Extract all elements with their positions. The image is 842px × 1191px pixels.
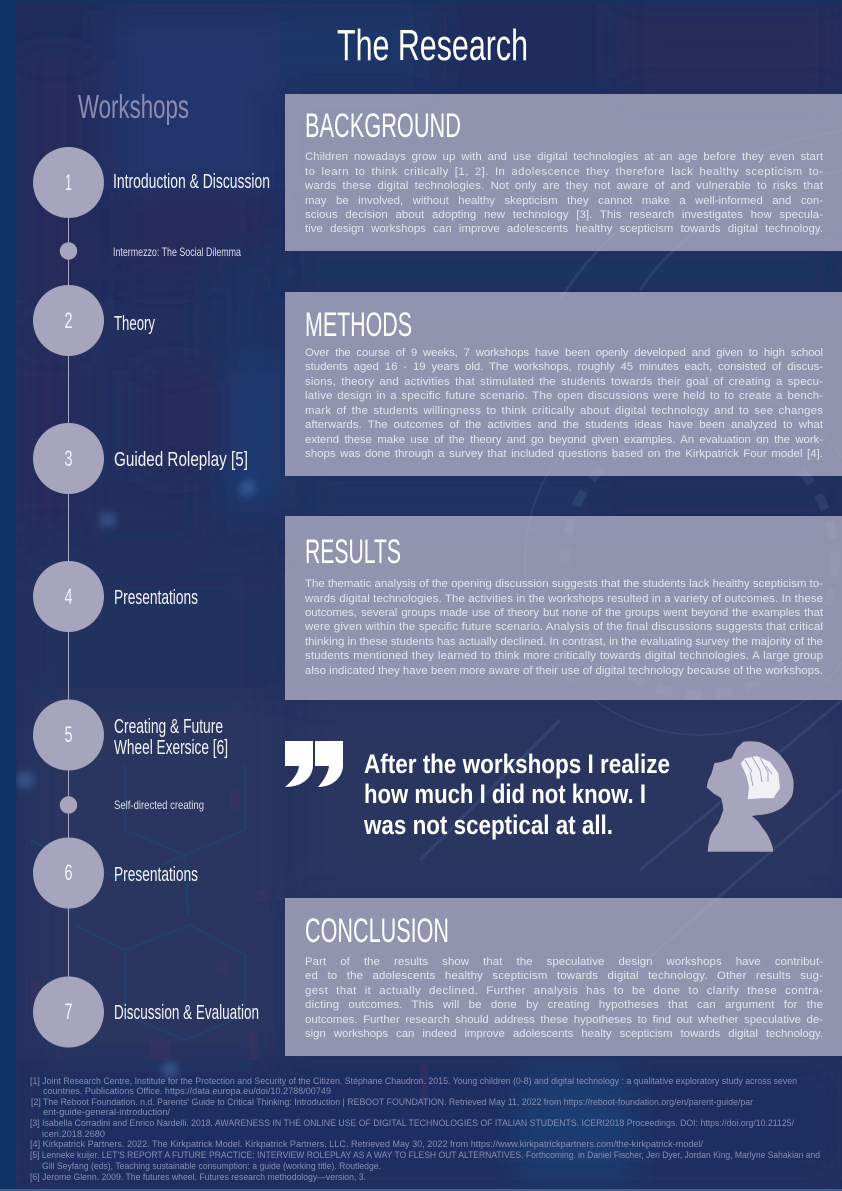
step 3 <box>33 423 248 494</box>
text: background body: tive design workshops can improve adolescents healthy scepticism towards digital technology. <box>305 223 823 235</box>
heading: conclusion: CONCLUSION <box>305 912 449 950</box>
step 4: Presentations <box>114 587 198 609</box>
timeline: workshops <box>33 147 270 1048</box>
text: methods body: students aged 16 - 19 years old. The workshops, roughly 45 minutes each, consisted of discus- <box>305 361 823 373</box>
step 6 <box>33 838 198 908</box>
step 6: 6 <box>64 860 72 885</box>
text: results body: students mentioned they learned to think more critically towards digital technologies. A large group <box>305 650 823 662</box>
heading: methods: METHODS <box>305 306 412 344</box>
references: iceri.2018.2680 <box>42 1129 105 1139</box>
references: [3] Isabella Corradini and Enrico Nardelli. 2018. AWARENESS IN THE ONLINE USE OF DIGITAL TECHNOLOGIES OF ITALIAN STUDENTS. ICERI2018 Proceedings. DOI: https://doi.org/10.21125/ <box>30 1118 795 1128</box>
panel: methods <box>285 292 842 476</box>
step 7: Discussion & Evaluation <box>114 1002 259 1024</box>
text: methods body: Over the course of 9 weeks, 7 workshops have been openly developed and given to high school <box>305 347 823 359</box>
text: results body: thinking in these students has actually declined. In contrast, in the evaluating survey the majority of the <box>305 636 823 648</box>
panel: conclusion <box>285 898 842 1056</box>
references: [2] The Reboot Foundation. n.d. Parents' Guide to Critical Thinking: Introduction | REBOOT FOUNDATION. Retrieved May 11, 2022 from https://reboot-foundation.org/en/parent-guide/par <box>31 1097 753 1107</box>
text: conclusion body <box>305 956 823 1040</box>
quote text <box>363 749 670 840</box>
references: [4] Kirkpatrick Partners. 2022. The Kirkpatrick Model. Kirkpatrick Partners, LLC. Retrieved May 30, 2022 from https://www.kirkpatrickpartners.com/the-kirkpatrick-model/ <box>30 1139 704 1149</box>
text: conclusion body: dicting outcomes. This will be done by creating hypotheses that can argument for the <box>305 999 823 1011</box>
step 2: Theory <box>114 313 155 335</box>
step 4 <box>33 561 198 632</box>
quote text: After the workshops I realize <box>364 749 670 779</box>
step 2: 2 <box>64 308 72 333</box>
heading: workshops: Workshops <box>78 88 189 125</box>
step 5: 5 <box>64 722 72 747</box>
text: methods body: lative design in a specific future scenario. The open discussions were held to to create a bench- <box>305 390 823 402</box>
references: countries. Publications Office. https://data.europa.eu/doi/10.2788/00749 <box>43 1086 331 1096</box>
panel: results <box>285 516 842 700</box>
intermezzo: Intermezzo: The Social Dilemma <box>113 245 241 259</box>
text: conclusion body: outcomes. Further research should address these hypotheses to find out whether speculative de- <box>305 1014 823 1026</box>
step 4: 4 <box>64 584 72 609</box>
callout: student quote <box>285 741 794 852</box>
step 7: 7 <box>64 999 72 1024</box>
text: conclusion body: ed to the adolescents healthy scepticism towards digital technology. Other results sug- <box>305 970 823 982</box>
text: results body <box>304 578 824 677</box>
step 5: Creating & Future <box>114 716 223 738</box>
text: results body: wards digital technologies. The activities in the workshops resulted in a variety of outcomes. In these <box>304 593 823 605</box>
references: [1] Joint Research Centre, Institute for the Protection and Security of the Citizen. Stéphane Chaudron. 2015. Young children (0-8) and digital technology : a qualitative exploratory study across seven <box>30 1076 797 1086</box>
intermezzo <box>60 242 241 260</box>
text: results body: outcomes, several groups made use of theory but none of the groups went beyond the examples that <box>305 607 824 619</box>
title: The Research <box>337 21 528 70</box>
step 1 <box>33 147 270 218</box>
text: conclusion body: gest that it actually declined. Further analysis has to be done to clarify these contra- <box>305 985 823 997</box>
step 5 <box>33 700 228 770</box>
text: methods body <box>305 347 824 460</box>
text: results body: also indicated they have been more aware of their use of digital technology because of the workshops. <box>305 665 823 677</box>
text: background body: to learn to think critically [1, 2]. In adolescence they therefore lack healthy scepticism to- <box>305 166 823 178</box>
heading: background: BACKGROUND <box>305 107 461 145</box>
quote text: how much I did not know. I <box>364 779 646 809</box>
text: background body <box>304 151 824 235</box>
references: [5] Lenneke kuijer. LET'S REPORT A FUTURE PRACTICE: INTERVIEW ROLEPLAY AS A WAY TO FLESH OUT ALTERNATIVES. Forthcoming. in Daniel Fischer, Jen Dyer, Jordan King, Marlyne Sahakian and <box>30 1150 820 1160</box>
icon: quotation marks <box>285 741 343 787</box>
self-directed creating: Self-directed creating <box>114 798 204 812</box>
step 2 <box>33 285 155 356</box>
step 1: 1 <box>65 170 72 195</box>
references: ent-guide-general-introduction/ <box>43 1107 171 1117</box>
text: results body: The thematic analysis of the opening discussion suggests that the students lack healthy scepticism to- <box>305 578 823 590</box>
panel: background <box>285 94 842 251</box>
text: methods body: shops was done through a survey that included questions based on the Kirkpatrick Four model [4]. <box>305 448 823 460</box>
text: methods body: sions, theory and activities that stimulated the students towards their goal of creating a specu- <box>305 376 823 388</box>
step 5: Wheel Exersice [6] <box>114 737 228 759</box>
text: results body: were given within the specific future scenario. Analysis of the final discussions suggests that critical <box>304 621 823 633</box>
references: Gill Seyfang (eds), Teaching sustainable consumption: a guide (working title). Routledge. <box>42 1161 381 1171</box>
text: background body: scious decision about adopting new technology [3]. This research investigates how specula- <box>305 209 823 221</box>
text: background body: may be involved, without healthy skepticism they cannot make a well-informed and con- <box>305 195 823 207</box>
text: background body: Children nowadays grow up with and use digital technologies at an age before they even start <box>305 151 824 163</box>
references: [6] Jerome Glenn. 2009. The futures wheel. Futures research methodology—version, 3. <box>30 1172 366 1182</box>
step 1: Introduction & Discussion <box>113 171 270 193</box>
icon: head with circuit brain <box>707 741 794 852</box>
text: methods body: mark of the students willingness to think critically about digital technology and to see changes <box>305 405 823 417</box>
step 3: 3 <box>64 446 72 471</box>
quote text: was not sceptical at all. <box>363 810 613 840</box>
heading: results: RESULTS <box>305 533 401 571</box>
text: conclusion body: Part of the results show that the speculative design workshops have contribut- <box>305 956 823 968</box>
text: conclusion body: sign workshops can indeed improve adolescents healty scepticism towards digital technology. <box>305 1028 823 1040</box>
step 7 <box>33 976 259 1048</box>
text: methods body: extend these make use of the theory and go beyond given examples. An evaluation on the work- <box>305 434 823 446</box>
text: background body: wards these digital technologies. Not only are they not aware of and vulnerable to risks that <box>304 180 824 192</box>
step 6: Presentations <box>114 864 198 886</box>
references <box>30 1076 820 1182</box>
step 3: Guided Roleplay [5] <box>114 449 248 471</box>
text: methods body: afterwards. The outcomes of the activities and the students ideas have been analyzed to what <box>305 419 824 431</box>
self-directed creating <box>60 796 204 814</box>
